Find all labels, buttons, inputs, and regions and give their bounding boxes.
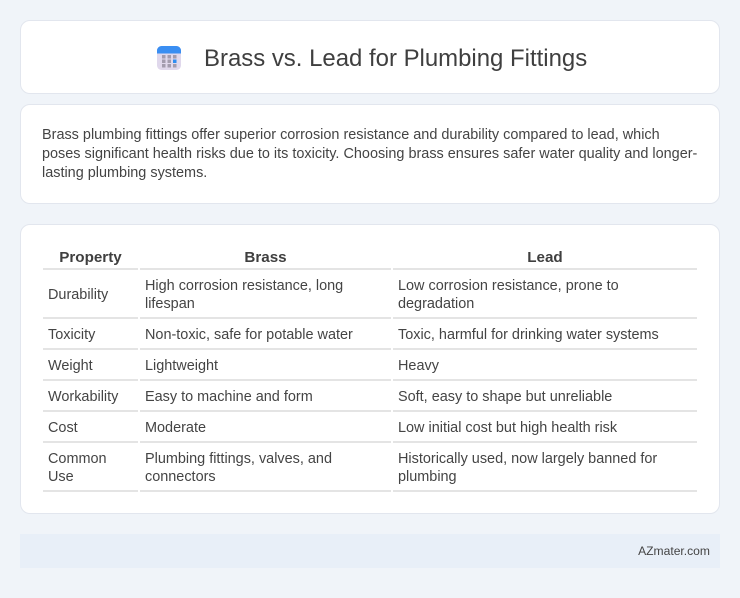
row: Workability: Easy to machine and form	[145, 389, 313, 405]
summary text: lasting plumbing systems.	[42, 165, 207, 181]
summary text: Brass plumbing fittings offer superior corrosion resistance and durability compared to lead, which	[42, 127, 660, 143]
row: Toxicity: Toxicity	[48, 327, 95, 343]
icon: calendar	[157, 46, 181, 70]
row: Common Use: connectors	[145, 469, 216, 485]
panel: header	[20, 20, 720, 94]
row: Cost: Low initial cost but high health risk	[398, 420, 617, 436]
row: Durability: Low corrosion resistance, prone to	[398, 278, 619, 294]
row: Durability: High corrosion resistance, long	[145, 278, 343, 294]
column heading: Lead: Lead	[527, 249, 563, 266]
row: Durability: lifespan	[145, 296, 195, 312]
row: Durability	[48, 278, 619, 312]
footer bar	[20, 534, 720, 568]
row: Workability: Soft, easy to shape but unreliable	[398, 389, 612, 405]
row: Workability: Workability	[48, 389, 118, 405]
row: Cost	[48, 420, 617, 436]
panel: summary	[20, 104, 720, 204]
row: Cost: Moderate	[145, 420, 206, 436]
table: properties of brass and lead	[43, 249, 697, 492]
row: Weight	[48, 358, 439, 374]
row: Toxicity: Toxic, harmful for drinking water systems	[398, 327, 659, 343]
column heading: Property: Property	[59, 249, 122, 266]
row: Cost: Cost	[48, 420, 78, 436]
row: Common Use: Use	[48, 469, 74, 485]
row: Durability: degradation	[398, 296, 474, 312]
row: Common Use	[48, 451, 657, 485]
row: Weight: Lightweight	[145, 358, 218, 374]
row: Common Use: plumbing	[398, 469, 457, 485]
row: Toxicity: Non-toxic, safe for potable water	[145, 327, 353, 343]
row: Weight: Weight	[48, 358, 93, 374]
row: Common Use: Plumbing fittings, valves, and	[145, 451, 332, 467]
row: Weight: Heavy	[398, 358, 439, 374]
column heading: Brass: Brass	[244, 249, 287, 266]
summary text	[42, 127, 697, 181]
row: Workability	[48, 389, 612, 405]
panel: comparison table	[20, 224, 720, 514]
title: Brass vs. Lead for Plumbing Fittings	[204, 45, 587, 72]
row: Toxicity	[48, 327, 659, 343]
summary text: poses significant health risks due to its toxicity. Choosing brass ensures safer water quality and longer-	[42, 146, 697, 162]
footer source text: AZmater.com	[638, 544, 710, 558]
row: Common Use: Historically used, now largely banned for	[398, 451, 657, 467]
row: Durability: Durability	[48, 287, 108, 303]
row: Common Use: Common	[48, 451, 107, 467]
